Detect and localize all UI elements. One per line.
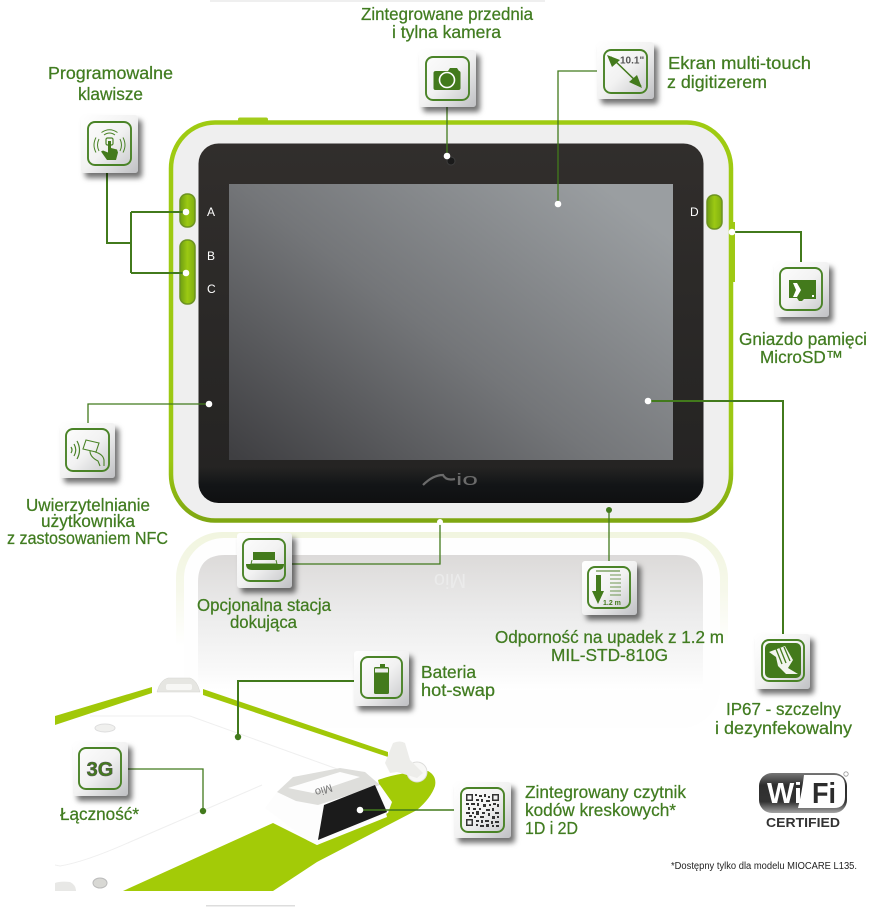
label: NFC: z zastosowaniem NFC [7, 528, 168, 548]
label: cameras [361, 4, 533, 42]
top left green edge [55, 687, 152, 725]
label: drop resistance [495, 627, 724, 665]
label: NFC: Uwierzytelnianie [26, 495, 150, 515]
mio logo [423, 470, 478, 489]
label: screen: z digitizerem [667, 72, 767, 92]
button label C: C [207, 282, 216, 296]
icon: battery [354, 651, 409, 706]
icon: 10.1 inch screen: 10.1" [620, 56, 644, 66]
label: programmable keys: klawisze [78, 84, 143, 104]
connector: screen [555, 71, 597, 207]
label: programmable keys: Programowalne [48, 63, 173, 83]
top page edge strip [210, 0, 545, 2]
icon: programmable keys [81, 115, 138, 173]
connector: NFC [88, 401, 212, 423]
tablet device photo [171, 118, 735, 520]
label: screen [667, 53, 811, 92]
label: screen: Ekran multi-touch [668, 53, 811, 73]
label: microSD slot: Gniazdo pamięci [739, 329, 867, 349]
label: microSD slot [739, 329, 867, 367]
icon: QR code [454, 782, 511, 838]
label: IP67: IP67 - szczelny [726, 699, 841, 719]
screw top [95, 724, 115, 732]
side clip [385, 742, 427, 782]
icon: drop 1.2 m [582, 561, 637, 615]
icon: 3G [73, 742, 128, 796]
programmable button D [707, 195, 722, 229]
label: dock: dokująca [230, 612, 297, 632]
logo: Wi-Fi certified [759, 772, 848, 830]
connector: barcode reader [357, 807, 454, 813]
logo: Wi-Fi certified: Fi [812, 778, 836, 810]
logo: Wi-Fi certified: Wi [767, 778, 802, 810]
back panel [55, 693, 435, 891]
label: programmable keys [48, 63, 173, 104]
connector: programmable keys [107, 173, 189, 276]
icon: microSD card [774, 262, 829, 317]
rear device photo [55, 678, 435, 891]
footnote: *Dostępny tylko dla modelu MIOCARE L135. [671, 861, 857, 872]
button label D: D [690, 205, 699, 219]
label: battery [421, 662, 495, 700]
connector: microSD [729, 229, 801, 262]
label: microSD slot: MicroSD™ [760, 347, 843, 367]
programmable button A [180, 194, 195, 227]
label: barcode reader: 1D i 2D [525, 818, 578, 838]
display [229, 184, 673, 460]
label: barcode reader: kodów kreskowych* [525, 800, 676, 820]
label: dock: Opcjonalna stacja [197, 595, 331, 615]
label: drop resistance: MIL-STD-810G [551, 645, 668, 665]
label: NFC: użytkownika [41, 511, 135, 531]
connector: IP67 [645, 398, 783, 634]
label: barcode reader [525, 782, 686, 838]
icon: drop 1.2 m: 1.2 m [603, 600, 621, 607]
logo: Wi-Fi certified: CERTIFIED [766, 816, 840, 830]
reflection of tablet [176, 532, 728, 728]
label: barcode reader: Zintegrowany czytnik [525, 782, 686, 802]
label: drop resistance: Odporność na upadek z 1.2 m [495, 627, 724, 647]
label: cameras: i tylna kamera [392, 22, 501, 42]
front camera lens [447, 157, 455, 165]
top clip [157, 678, 200, 692]
icon: IP67 hand [755, 634, 810, 689]
scanner housing [265, 768, 392, 845]
label: 3G connectivity: Łączność* [60, 804, 139, 824]
scanner logo: Mio [313, 781, 334, 798]
button label A: A [207, 205, 215, 219]
icon: camera [419, 50, 476, 107]
mio logo: io [456, 470, 478, 489]
label: NFC [7, 495, 168, 548]
label: cameras: Zintegrowane przednia [361, 4, 533, 24]
green lower edge [123, 771, 435, 891]
label: battery: Bateria [421, 662, 476, 682]
top right green edge [203, 689, 388, 757]
icon: 3G: 3G [87, 759, 113, 781]
screw bottom [93, 878, 107, 888]
connector: camera [444, 107, 450, 159]
label: IP67: i dezynfekowalny [715, 718, 852, 738]
reflection of tablet: Mio [434, 569, 466, 591]
bottom corner part [55, 882, 76, 891]
bottom page edge strip [206, 905, 295, 906]
scanner window [318, 785, 387, 840]
icon: docking station [237, 533, 292, 588]
label: battery: hot-swap [421, 680, 495, 700]
icon: NFC [60, 423, 115, 478]
connector: battery [235, 681, 354, 740]
screen bezel [198, 144, 704, 503]
label: IP67 [715, 699, 852, 738]
label: dock [197, 595, 331, 632]
connector: 3G [128, 769, 206, 814]
button label B: B [207, 249, 215, 263]
icon: 10.1 inch screen [597, 42, 654, 99]
tablet body [238, 118, 268, 122]
connector: dock [292, 519, 443, 564]
connector: drop resistance [606, 507, 612, 561]
programmable buttons B and C [180, 240, 195, 304]
